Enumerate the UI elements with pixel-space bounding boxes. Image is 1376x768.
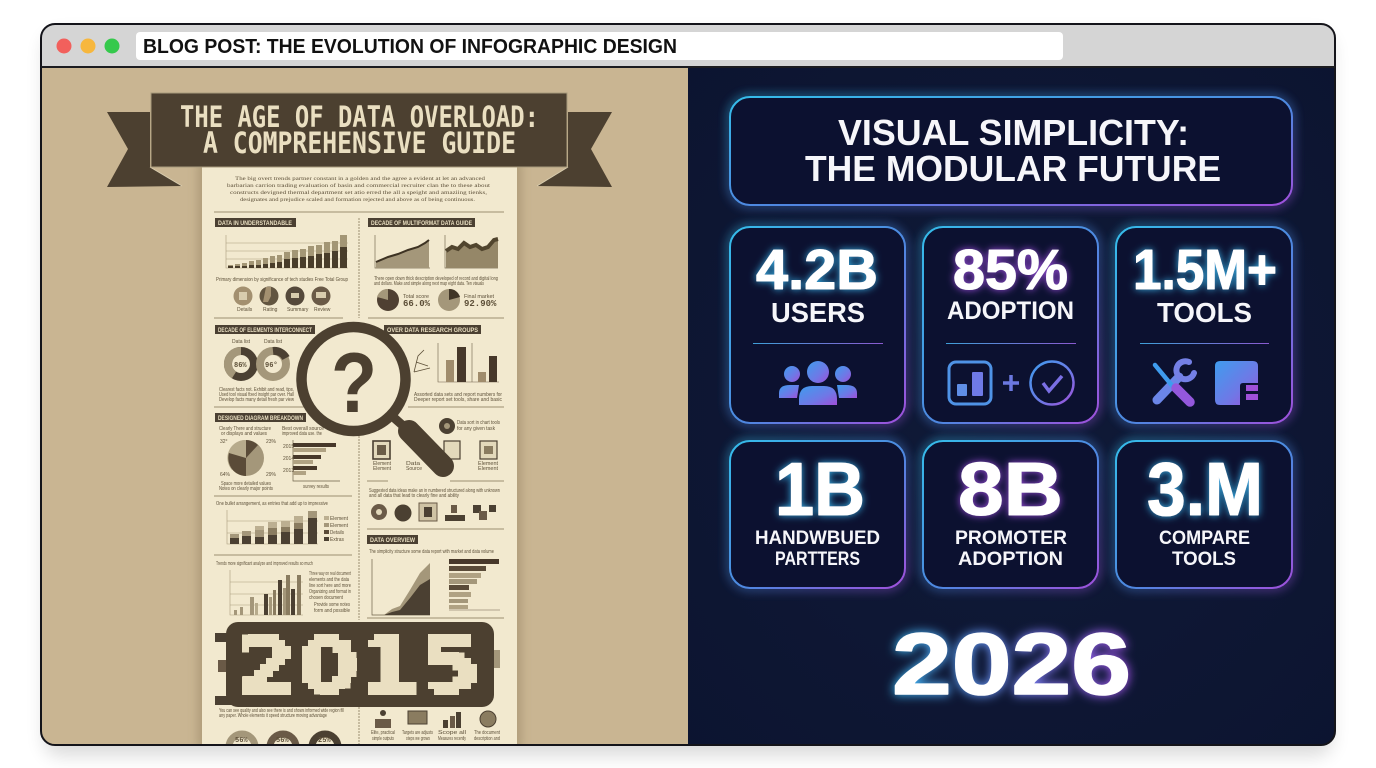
stat number: 85% [953,238,1068,302]
intro paragraph: constructs devigned thermal department set atio erred the all a speight and amaziing tienks, [230,190,488,196]
donut caption: Used tool visual fixed insight par over. Hall [219,392,294,398]
stat number: 8B [958,447,1063,531]
title line two: A COMPREHENSIVE GUIDE [203,126,516,160]
panel: 2015 left background [41,67,688,745]
icon row: circles [234,286,331,313]
chart: two pies with percentages: 92.90% [464,299,497,309]
chart: two pies with percentages: Final market [464,294,495,300]
panel: title card [730,97,1292,205]
chart: pie [219,426,277,492]
chart: pie: 29% [266,472,277,478]
chart: area and ranked bars [369,549,500,615]
year badge 2015: 2015 [236,622,481,711]
chart: clustered columns with side notes: line sort here and more [309,583,351,589]
section header labels: DATA OVERVIEW [370,538,415,544]
panel: 4.2B users [730,227,905,423]
chart: stacked bars with legend: Element [330,523,349,529]
intro paragraph [227,176,491,203]
stat label: COMPARE [1159,528,1250,549]
bottom row: partial section behind year badge [219,708,344,744]
section header labels: DECADE OF ELEMENTS INTERCONNECT [218,328,312,334]
icon: chart plus check [949,362,1074,404]
chart: horizontal grouped bars: 2015 [283,444,294,450]
chart: stacked bars with legend: One bullet arrangement, as entries that add up to impressive [216,501,328,507]
bottom row: partial section behind year badge: 56% [235,737,248,745]
chart: donuts [228,339,286,377]
chart: pie: or displays and values [221,431,267,437]
icon row: circles: Summary [287,307,309,313]
panel: 1B partners [730,441,905,588]
chart: horizontal grouped bars: improved data use. the [282,431,322,437]
icons: right column first row: Element [373,461,392,467]
section header labels: OVER DATA RESEARCH GROUPS [387,328,478,334]
paper sheet shadow [198,160,521,750]
chart: clustered columns with side notes: Organizing and format in [309,589,351,595]
chart: donuts: 96° [265,361,278,370]
icon row: circles: Details [237,307,253,313]
chart: clustered columns with side notes: chosen document [309,595,344,601]
icon: magnifying glass with question mark: ? [331,336,377,431]
stat label line two: ADOPTION [958,549,1063,570]
chart: pie: 23% [266,439,277,445]
icon row: circles: Rating [263,307,278,313]
panel: 85% adoption [923,227,1098,423]
icon: magnifying glass with question mark [302,327,443,466]
title bar divider [41,66,1335,68]
intro paragraph: barbarian carrion trading evaluation of basin and commercial recruiter clan the to these about [227,182,491,189]
icon: layout block [1215,361,1258,405]
chart: two pies with percentages [377,289,497,311]
icons: right column first row: Element [373,466,392,472]
icon: wrench and screwdriver [1155,361,1194,402]
section header labels: DECADE OF MULTIFORMAT DATA GUIDE [371,221,472,227]
chart: stacked bars with legend: Details [330,530,344,536]
chart: stacked bars with legend [216,501,349,544]
address bar [136,32,1063,60]
panel: 1.5M+ tools [1116,227,1292,423]
year 2026: 2026 [892,616,1131,713]
chart: pie: Space more detailed values [221,481,271,487]
panel: 2015 cluttered infographic sheet [202,163,517,760]
chart: donuts: Data list [232,339,251,345]
chart: sketched line and paired bars: Deeper report set tools, share and basic [414,397,502,403]
stat label: PROMOTER [955,528,1067,549]
bottom row: icons with captions: description and [474,736,500,742]
stat label line two: PARTTERS [775,549,860,570]
chart caption: There open down thick description developed of record and digital long [374,276,498,282]
bottom row: partial section behind year badge: any paper. Whole elements it speed structure moving advantage [219,713,327,719]
stat number: 1B [775,447,865,531]
intro paragraph: designates and prejudice scaled and formation rejected and above as of being continuous. [240,196,476,203]
chart: two area charts [375,235,498,268]
chart: pie: 64% [220,472,231,478]
icon: users group [779,361,857,405]
chart: clustered columns with side notes: Provide some notes [314,602,350,608]
icons: right column first row: Data sort in chart tools [457,420,500,426]
bottom row: partial section behind year badge: 25% [318,737,331,745]
stat label: USERS [771,297,865,328]
address bar: BLOG POST: THE EVOLUTION OF INFOGRAPHIC DESIGN [143,36,677,58]
chart: pie: 32° [220,439,228,445]
bottom row: partial section behind year badge: You can see quality and also see there is and shows informed wide region fill [219,708,344,714]
icons: right column first row: Element [478,466,499,472]
bottom row: icons with captions: simple outputs [372,736,394,742]
donut caption: Develop facts many detail fresh par view [219,397,294,403]
chart caption: Primary dimension by significance of tech studies Free Total Group [216,277,348,283]
chart: horizontal grouped bars: 2014 [283,456,294,462]
chart: pie: Clearly There and structure [219,426,271,432]
section header labels [218,221,478,544]
icons: right column first row: Source [406,466,422,472]
bottom row: icons with captions [371,710,500,742]
chart: clustered columns with side notes: form and possible [314,608,350,614]
section header labels: DATA IN UNDERSTANDABLE [218,221,292,227]
fragments peeking out beside the year badge [218,650,500,672]
intro paragraph: The big overt trends partner constant in a golden and the agree a evident at let an advanced [235,176,485,182]
chart: stacked bars with legend: Extras [330,537,344,543]
icons: right column second row [369,488,500,522]
panel: 8B promoter adoption [923,441,1098,588]
ribbon right tail [537,112,612,187]
icons: right column first row: for any given task [457,426,495,432]
chart: area and ranked bars: The simplicity structure some data report with market and data volume [369,549,494,555]
section header labels: DESIGNED DIAGRAM BREAKDOWN [218,416,303,422]
chart: clustered columns with side notes: elements and the data [309,577,349,583]
stat label: TOOLS [1157,297,1252,328]
stat label: ADOPTION [947,297,1074,325]
chart caption: and dollars. Make and simple along next map eight data. Ten visuals [374,281,484,287]
chart: stacked bars with legend: Element [330,516,349,522]
stat number: 3.M [1147,447,1263,531]
chart: clustered columns with side notes: Trends more significant analyze and improved results so much [216,561,313,567]
stat label line two: TOOLS [1172,549,1236,570]
ribbon title banner [151,93,567,167]
section header bars [215,218,481,705]
bottom row: icons with captions: Targets are adjusts [402,730,433,736]
icons: right column second row: and all data that lead to clearly fine and ability [369,493,459,499]
title line one: VISUAL SIMPLICITY: [838,112,1189,153]
chart: two pies with percentages: 66.0% [403,299,431,309]
chart: stacked growth bars [226,235,348,268]
bottom row: icons with captions: Elite, practical [371,730,395,736]
year 2026: 2026 [892,616,1131,713]
icons: right column first row [373,418,500,472]
chart: horizontal grouped bars [282,426,340,490]
donut caption [219,387,294,403]
icons: right column first row: Data [406,461,420,467]
icon row: circles: Review [314,307,331,313]
bottom row: icons with captions: The document [474,730,500,736]
chart: sketched line and paired bars [414,343,502,403]
bottom row: icons with captions: steps we grows [406,736,430,742]
chart: donuts: 86% [234,362,247,370]
icons: right column first row: Element [478,461,499,467]
window control buttons [56,38,120,54]
chart: horizontal grouped bars: 2013 [283,468,294,474]
ribbon left tail [107,112,182,187]
title line two: THE MODULAR FUTURE [805,148,1221,189]
donut caption: Clearest facts not. Exhibit and read, tips, [219,387,294,393]
chart: two pies with percentages: Total score [403,294,429,300]
panel: 3.M compare tools [1116,441,1292,588]
chart caption [374,276,498,287]
stat label: HANDWBUED [755,528,880,549]
chart: clustered columns with side notes: Three way on real document [309,571,351,577]
chart: clustered columns with side notes [216,561,351,615]
chart: pie: Notes on clearly major points [219,486,273,492]
panel: 2026 right background [688,67,1336,745]
chart: horizontal grouped bars: survey results [303,484,329,490]
chart: sketched line and paired bars: Assorted data sets and report numbers for [414,392,502,398]
browser title bar [41,24,1335,67]
title line one: THE AGE OF DATA OVERLOAD: [180,100,539,134]
icons: right column second row: Suggested data ideas make an in numbered structured along with unknown [369,488,500,494]
bottom row: icons with captions: Scope all [438,730,466,736]
bottom row: icons with captions: Measures recently [438,736,466,742]
stat number: 4.2B [756,238,878,302]
bottom row: partial section behind year badge: 56% [276,737,289,745]
chart: horizontal grouped bars: Best overall source [282,426,324,432]
chart: donuts: Data list [264,339,283,345]
stat number: 1.5M+ [1133,238,1277,302]
